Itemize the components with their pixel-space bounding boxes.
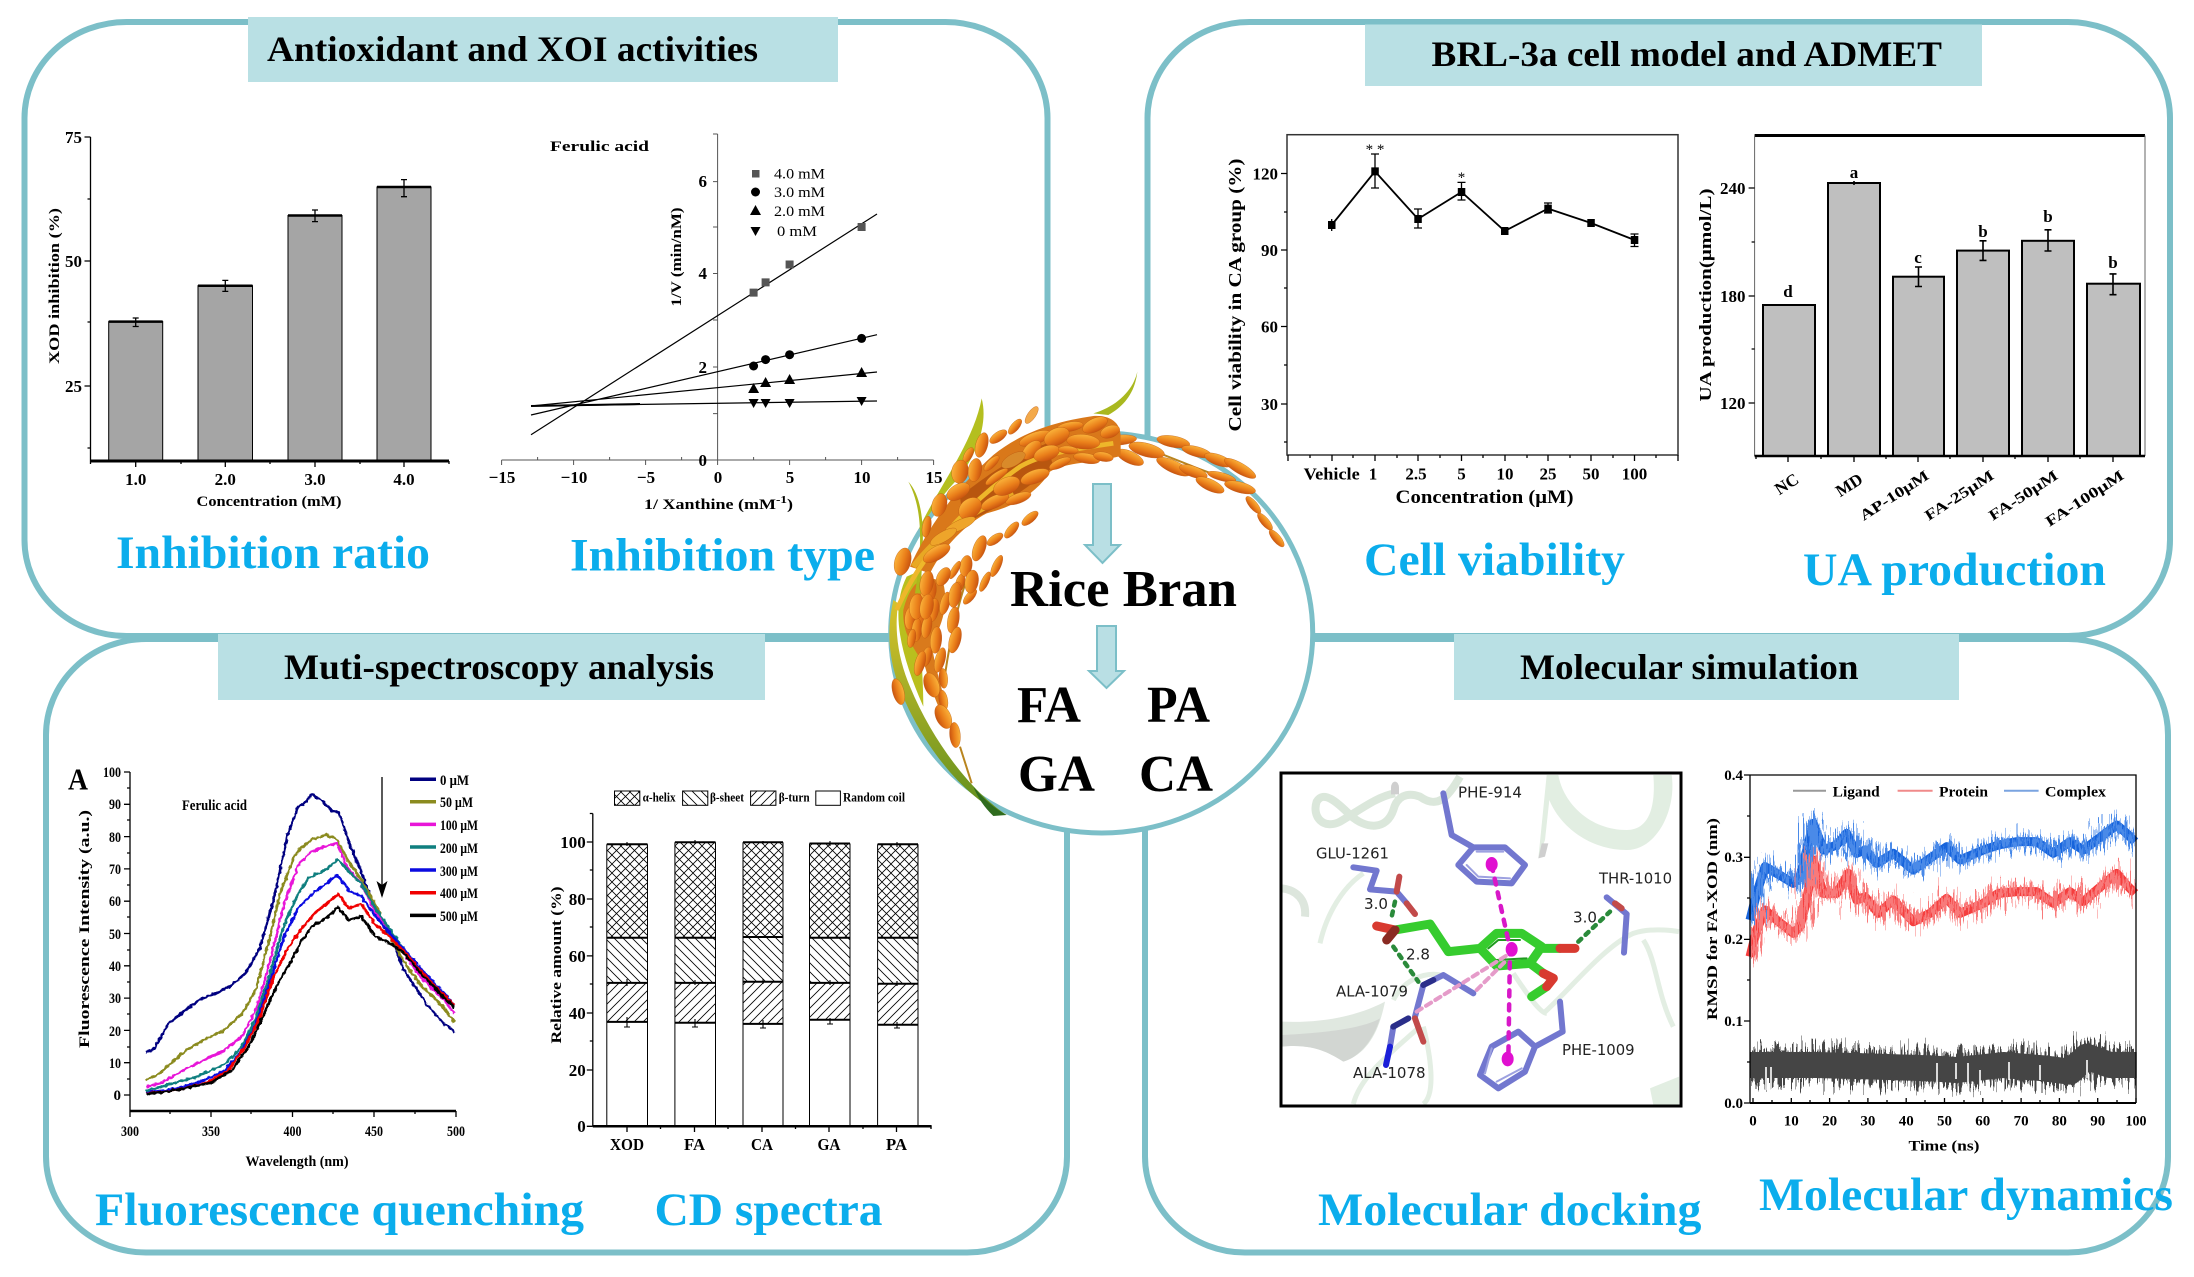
chart: Lineweaver-Burk inhibition type: 10 [854,468,870,487]
chart: Lineweaver-Burk inhibition type: 4 [698,264,708,283]
stacked bar chart: CD spectra: 0 [577,1117,586,1136]
line chart: fluorescence quenching: Wavelength (nm) [246,1154,348,1170]
line chart: fluorescence quenching: 450 [365,1124,383,1140]
bar chart: inhibition ratio: 1.0 [125,470,146,489]
stacked bar chart: CD spectra: 80 [569,890,586,909]
line chart: cell viability: Concentration (μM) [1396,487,1574,508]
line chart: cell viability: 60 [1261,318,1278,336]
bar chart: inhibition ratio: Concentration (mM) [196,494,342,510]
line chart: cell viability: Cell viability in CA group (%) [1225,158,1246,432]
bar chart: inhibition ratio: 3.0 [304,470,326,489]
chart: Lineweaver-Burk inhibition type: -1 [776,494,787,506]
label: Molecular docking: Molecular docking [1318,1184,1702,1236]
chart: Lineweaver-Burk inhibition type: 1/V (min/nM) [669,208,685,306]
line chart: cell viability: 2.5 [1405,465,1427,484]
line chart: molecular dynamics RMSD: 0.3 [1724,850,1743,866]
line chart: molecular dynamics RMSD: 100 [2126,1114,2146,1130]
line chart: molecular dynamics RMSD: 20 [1822,1114,1837,1130]
bar chart: UA production: NC [1771,469,1802,499]
line chart: molecular dynamics RMSD: Protein [1939,784,1989,800]
stacked bar chart: CD spectra: 20 [569,1061,586,1080]
stacked bar chart: CD spectra: β-sheet [710,790,745,805]
line chart: cell viability: 25 [1540,465,1556,484]
label: Inhibition type: Inhibition type [570,530,875,582]
chart: Lineweaver-Burk inhibition type: −10 [561,468,587,487]
line chart: molecular dynamics RMSD: 10 [1784,1114,1799,1130]
text: FA: FA [1017,677,1081,734]
molecular docking image [1281,773,1681,1106]
line chart: fluorescence quenching: 200 μM [440,841,478,857]
line chart: molecular dynamics RMSD: 0.4 [1724,768,1744,784]
molecular docking image: PHE-1009 [1562,1041,1635,1059]
line chart: fluorescence quenching: 400 μM [440,886,478,902]
line chart: fluorescence quenching: 350 [202,1124,220,1140]
line chart: cell viability: 5 [1457,465,1466,484]
line chart: fluorescence quenching: 30 [109,991,121,1007]
line chart: fluorescence quenching: 80 [109,830,121,846]
heading: BRL-3a cell model and ADMET: BRL-3a cell model and ADMET [1432,34,1942,74]
bar chart: UA production: b [2108,253,2118,272]
line chart: fluorescence quenching: 20 [109,1024,121,1040]
line chart: fluorescence quenching [68,762,478,1170]
text: GA: GA [1018,746,1095,803]
panel: Muti-spectroscopy analysis [46,634,1067,1252]
line chart: molecular dynamics RMSD: Ligand [1833,784,1880,800]
bar chart: UA production: d [1783,282,1793,301]
chart: Lineweaver-Burk inhibition type: 0 mM [777,224,817,240]
line chart: molecular dynamics RMSD: 50 [1937,1114,1952,1130]
molecular docking image: ALA-1078 [1353,1064,1426,1082]
line chart: cell viability: 120 [1252,164,1278,184]
illustration: rice panicle [889,372,1287,816]
label: Fluorescence quenching: Fluorescence quenching [95,1184,584,1236]
stacked bar chart: CD spectra: PA [886,1135,908,1154]
line chart: molecular dynamics RMSD: 0 [1749,1114,1757,1130]
bar chart: UA production: FA-25μM [1922,468,1997,524]
line chart: fluorescence quenching: 0 [114,1088,121,1104]
chart: Lineweaver-Burk inhibition type: 6 [698,172,707,191]
bar chart: UA production: FA-100μM [2043,468,2127,530]
line chart: fluorescence quenching: 300 [121,1124,139,1140]
stacked bar chart: CD spectra: 60 [569,947,586,966]
line chart: fluorescence quenching: 70 [109,862,121,878]
bar chart: UA production: 120 [1720,394,1746,413]
stacked bar chart: CD spectra: Relative amount (%) [549,886,565,1044]
line chart: fluorescence quenching: 50 μM [440,795,473,811]
line chart: molecular dynamics RMSD: Time (ns) [1908,1139,1980,1155]
text: PA: PA [1147,677,1210,734]
label: CD spectra: CD spectra [654,1184,882,1236]
line chart: molecular dynamics RMSD: 40 [1899,1114,1914,1130]
line chart: fluorescence quenching: 40 [109,959,121,975]
chart: Lineweaver-Burk inhibition type: 2.0 mM [774,204,825,220]
line chart: cell viability: 1 [1369,465,1377,484]
bar chart: UA production: 240 [1720,179,1746,198]
line chart: fluorescence quenching: 60 [109,894,121,910]
heading: Molecular simulation: Molecular simulation [1520,647,1858,687]
line chart: fluorescence quenching: A [68,762,89,796]
bar chart: UA production: FA-50μM [1986,468,2061,524]
bar chart: inhibition ratio: 2.0 [215,470,236,489]
bar chart: UA production: a [1850,163,1859,182]
line chart: fluorescence quenching: Fluorescence Intensity (a.u.) [77,810,93,1048]
line chart: cell viability: * [1458,170,1465,186]
stacked bar chart: CD spectra [549,790,932,1154]
chart: Lineweaver-Burk inhibition type: Ferulic acid [550,139,650,155]
heading: Muti-spectroscopy analysis: Muti-spectroscopy analysis [284,647,714,687]
chart: Lineweaver-Burk inhibition type: 3.0 mM [774,185,825,201]
line chart: fluorescence quenching: 10 [109,1056,121,1072]
line chart: fluorescence quenching: 100 [103,765,121,781]
bar chart: inhibition ratio: 4.0 [393,470,415,489]
bar chart: inhibition ratio: 75 [65,128,82,147]
text: CA: CA [1139,746,1213,803]
chart: Lineweaver-Burk inhibition type: 1/ Xanthine (mM [644,497,754,513]
line chart: cell viability: 50 [1582,465,1600,484]
bar chart: UA production: c [1914,248,1922,267]
molecular docking image: THR-1010 [1598,870,1672,888]
bar chart: UA production: UA production(μmol/L) [1696,188,1715,402]
stacked bar chart: CD spectra: CA [751,1135,774,1154]
bar chart: inhibition ratio: 50 [65,252,82,271]
molecular docking image: GLU-1261 [1316,845,1389,863]
line chart: fluorescence quenching: Ferulic acid [182,798,248,814]
stacked bar chart: CD spectra: β-turn [779,790,810,805]
stacked bar chart: CD spectra: 40 [569,1004,586,1023]
stacked bar chart: CD spectra: Random coil [843,790,905,805]
line chart: molecular dynamics RMSD: RMSD for FA-XOD (nm) [1705,818,1721,1020]
chart: Lineweaver-Burk inhibition type: 5 [786,468,794,487]
line chart: molecular dynamics RMSD: 90 [2090,1114,2105,1130]
molecular docking image: 3.0 [1573,908,1597,926]
line chart: molecular dynamics RMSD [1705,768,2146,1155]
label: Inhibition ratio: Inhibition ratio [116,527,430,579]
line chart: fluorescence quenching: 100 μM [440,818,478,834]
molecular docking image: PHE-914 [1458,784,1522,802]
line chart: fluorescence quenching: 300 μM [440,864,478,880]
bar chart: UA production: MD [1832,469,1866,501]
line chart: molecular dynamics RMSD: 60 [1975,1114,1990,1130]
stacked bar chart: CD spectra: FA [684,1135,706,1154]
arrow: down to Rice Bran [1085,484,1120,563]
chart: Lineweaver-Burk inhibition type: −5 [637,468,655,487]
chart: Lineweaver-Burk inhibition type: 4.0 mM [774,166,825,182]
bar chart: UA production: b [1978,222,1988,241]
line chart: cell viability: 30 [1261,395,1278,414]
line chart: fluorescence quenching: 500 μM [440,909,478,925]
chart: Lineweaver-Burk inhibition type: ) [787,497,793,513]
molecular docking image: 2.8 [1406,946,1430,964]
stacked bar chart: CD spectra: α-helix [643,790,676,805]
stacked bar chart: CD spectra: GA [818,1135,841,1154]
line chart: cell viability: 90 [1261,241,1278,260]
line chart: cell viability: Vehicle [1304,465,1360,484]
molecular docking image: 3.0 [1364,895,1388,913]
line chart: molecular dynamics RMSD: 0.0 [1724,1096,1743,1112]
line chart: molecular dynamics RMSD: Complex [2045,784,2107,800]
line chart: molecular dynamics RMSD: 80 [2052,1114,2067,1130]
line chart: cell viability: 10 [1496,465,1514,484]
chart: Lineweaver-Burk inhibition type: 0 [698,451,707,470]
center circle: Rice Bran [891,433,1313,833]
panel: BRL-3a cell model and ADMET [1148,22,2170,636]
bar chart: UA production [1696,136,2145,530]
line chart: molecular dynamics RMSD: 0.2 [1724,932,1743,948]
heading: Antioxidant and XOI activities: Antioxidant and XOI activities [267,29,758,69]
bar chart: inhibition ratio: XOD inhibition (%) [47,208,63,364]
stacked bar chart: CD spectra: 100 [560,833,586,852]
line chart: fluorescence quenching: 400 [284,1124,302,1140]
line chart: cell viability: * * [1366,142,1384,158]
panel: Molecular simulation [1145,634,2173,1252]
label: Cell viability: Cell viability [1364,534,1625,586]
label: UA production: UA production [1803,544,2106,596]
line chart: molecular dynamics RMSD: 30 [1860,1114,1875,1130]
chart: Lineweaver-Burk inhibition type: 15 [926,468,942,487]
chart: Lineweaver-Burk inhibition type: 0 [714,468,722,487]
line chart: fluorescence quenching: 50 [109,927,121,943]
bar chart: UA production: AP-10μM [1857,468,1932,524]
text: Rice Bran: Rice Bran [1010,561,1237,618]
bar chart: UA production: b [2043,207,2053,226]
molecular docking image: ALA-1079 [1336,983,1408,1001]
bar chart: inhibition ratio: 25 [65,377,82,396]
bar chart: inhibition ratio [47,128,449,510]
line chart: molecular dynamics RMSD: 70 [2014,1114,2029,1130]
line chart: cell viability: 100 [1622,465,1647,484]
line chart: molecular dynamics RMSD: 0.1 [1724,1014,1743,1030]
line chart: fluorescence quenching: 500 [447,1124,465,1140]
chart: Lineweaver-Burk inhibition type [489,134,942,513]
stacked bar chart: CD spectra: XOD [610,1135,644,1154]
panel: Antioxidant and XOI activities [24,17,1048,636]
chart: Lineweaver-Burk inhibition type: −15 [489,468,515,487]
label: Molecular dynamics: Molecular dynamics [1759,1169,2173,1221]
bar chart: UA production: 180 [1720,287,1746,306]
line chart: fluorescence quenching: 0 μM [440,773,469,789]
chart: Lineweaver-Burk inhibition type: 2 [698,358,707,377]
arrow: down to phenolic acids [1089,626,1124,688]
line chart: fluorescence quenching: 90 [109,797,121,813]
line chart: cell viability [1225,135,1678,508]
